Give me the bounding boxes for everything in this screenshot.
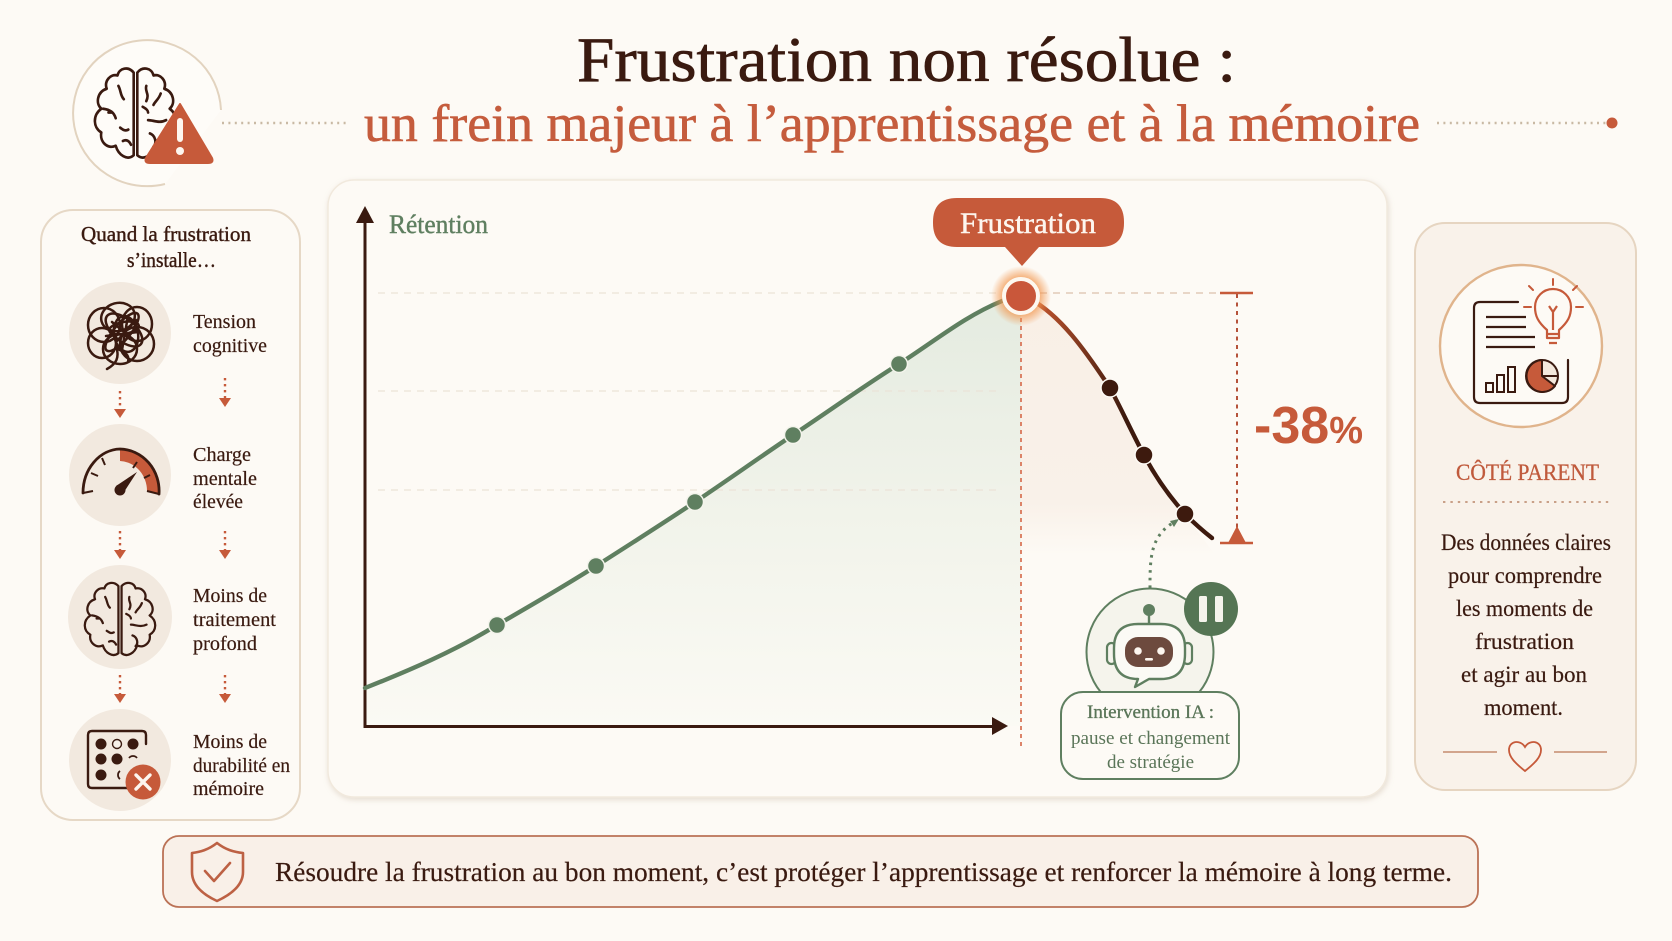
- panel background: [41, 210, 300, 820]
- dotted arrow to curve: [1150, 519, 1179, 588]
- parent text: moment.: [1484, 695, 1563, 720]
- robot circle: [1086, 588, 1214, 716]
- AI intervention: [1061, 582, 1239, 779]
- area under falling curve: [1021, 296, 1215, 555]
- header connector dotted right: [1437, 118, 1618, 128]
- subtitle: un frein majeur à l’apprentissage et à la mémoire: [364, 95, 1420, 153]
- peak marker: [991, 266, 1051, 326]
- axes: [356, 206, 1008, 735]
- parent heading: CÔTÉ PARENT: [1456, 459, 1599, 485]
- label: traitement: [193, 609, 276, 631]
- label: [193, 444, 257, 513]
- banner box: [163, 836, 1478, 907]
- frustration callout: Frustration: [960, 207, 1096, 240]
- icon ring: [73, 40, 221, 186]
- frustration callout: [933, 198, 1124, 266]
- label: Charge: [193, 444, 251, 466]
- y axis label: Rétention: [389, 210, 488, 239]
- label: [193, 585, 276, 655]
- drop value: -38%: [1254, 397, 1363, 455]
- label: mentale: [193, 468, 257, 490]
- arrows row 2: [114, 531, 231, 559]
- icon: memory grid: [88, 731, 160, 800]
- item: tension cognitive: [69, 282, 267, 384]
- item: durabilité mémoire: [69, 709, 290, 811]
- item: traitement profond: [68, 565, 276, 669]
- icon: shield check: [192, 843, 243, 901]
- panel heading: [81, 222, 251, 272]
- icon: warning triangle: [146, 104, 212, 163]
- intervention label: [1061, 692, 1239, 779]
- dotted divider: [1443, 501, 1610, 503]
- parent text: Des données claires: [1441, 530, 1611, 555]
- panel: côté parent: [1415, 223, 1636, 790]
- intervention label: de stratégie: [1107, 752, 1194, 773]
- rising curve: [365, 301, 1002, 688]
- title: Frustration non résolue :: [577, 25, 1236, 95]
- item: charge mentale: [69, 424, 257, 526]
- panel background: [1415, 223, 1636, 790]
- label: [193, 731, 290, 800]
- panel: causes: [41, 210, 300, 820]
- chart card: [328, 180, 1387, 797]
- parent text: et agir au bon: [1461, 662, 1587, 687]
- grid lines: [378, 293, 1220, 490]
- header icon: brain with warning: [73, 40, 221, 186]
- label: [193, 311, 267, 357]
- panel heading: Quand la frustration: [81, 222, 251, 246]
- intervention label: pause et changement: [1071, 728, 1231, 749]
- intervention label: Intervention IA :: [1087, 702, 1214, 723]
- icon: pause badge: [1184, 582, 1238, 636]
- parent text: frustration: [1475, 629, 1575, 654]
- icon: gauge: [83, 449, 159, 496]
- label: Tension: [193, 311, 256, 333]
- label: cognitive: [193, 335, 267, 357]
- drop measure bracket: [1220, 293, 1253, 543]
- panel: retention chart: [328, 180, 1387, 797]
- bottom banner: [163, 836, 1478, 907]
- arrows row 1: [114, 378, 231, 418]
- label: profond: [193, 633, 257, 655]
- heart ornament: [1443, 742, 1607, 771]
- arrows row 3: [114, 675, 231, 703]
- label: durabilité en: [193, 755, 290, 777]
- label: mémoire: [193, 778, 264, 800]
- icon: robot: [1107, 604, 1192, 687]
- icon: brain: [85, 583, 155, 655]
- parent text: les moments de: [1456, 596, 1593, 621]
- parent text: [1441, 530, 1611, 720]
- label: Moins de: [193, 731, 267, 753]
- icon: brain: [95, 69, 176, 158]
- banner text: Résoudre la frustration au bon moment, c’est protéger l’apprentissage et renforcer la mémoire à long terme.: [275, 857, 1452, 887]
- falling curve: [1030, 299, 1212, 538]
- icon: tangle: [88, 299, 154, 369]
- icon: report and bulb: [1440, 265, 1602, 427]
- area under rising curve: [365, 296, 1021, 726]
- label: Moins de: [193, 585, 267, 607]
- header connector dotted left: [222, 122, 346, 124]
- panel heading: s’installe…: [127, 248, 216, 272]
- parent text: pour comprendre: [1448, 563, 1602, 588]
- peak vertical marker: [1020, 310, 1022, 748]
- label: élevée: [193, 491, 243, 513]
